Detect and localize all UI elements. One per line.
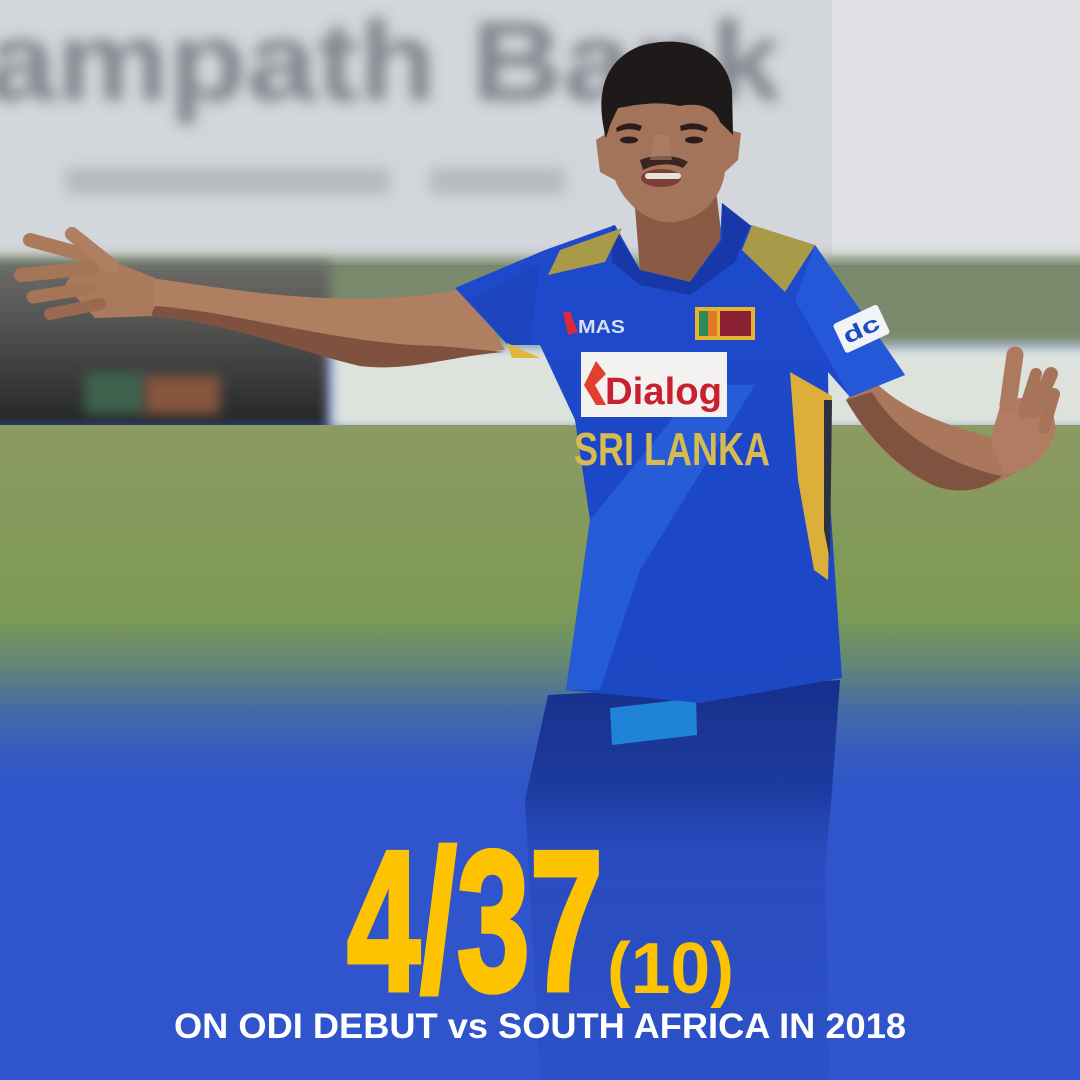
sponsor panel: Dialog: Dialog (605, 371, 722, 413)
logo: MAS (563, 312, 625, 337)
left arm and hand (21, 234, 505, 367)
blurred sponsor board lettering (0, 0, 782, 194)
sponsor panel: Dialog (581, 352, 727, 417)
hair (601, 42, 733, 138)
shorts waistband tag (610, 698, 697, 745)
sleeve badge: dc (839, 310, 884, 349)
head (596, 42, 741, 222)
shirt shoulder trim right (742, 225, 815, 292)
blurred sponsor board lettering: ampath Bank (0, 0, 782, 124)
yellow side panel (790, 372, 832, 580)
team name on shirt: SRI LANKA (574, 423, 770, 475)
headline stat: bowling figures: 4/37 (347, 810, 603, 1033)
neck (634, 190, 722, 282)
blue fade overlay (0, 620, 1080, 800)
right arm and hand (846, 355, 1056, 491)
logo: MAS: MAS (578, 317, 625, 337)
shirt (455, 203, 905, 703)
sleeve underside yellow (507, 343, 540, 358)
icon: Sri Lanka flag (695, 307, 755, 340)
subtitle: ON ODI DEBUT vs SOUTH AFRICA IN 2018 (174, 1007, 906, 1046)
shirt shoulder trim left (548, 228, 622, 275)
sleeve badge (832, 304, 890, 354)
shorts (525, 680, 840, 1080)
overs in brackets: (10) (607, 929, 734, 1009)
